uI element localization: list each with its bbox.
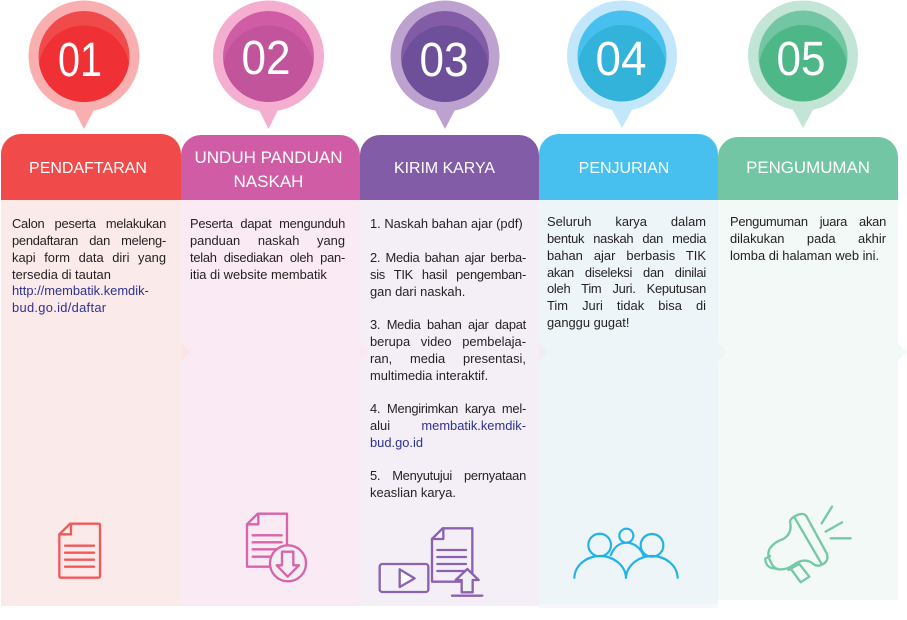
text: pendaftaran description: bud.go.id/daftar bbox=[12, 300, 106, 315]
text: kirim karya steps: gan dari naskah. bbox=[370, 284, 465, 299]
arrow: step 5 end bbox=[898, 344, 906, 360]
arrow: step 2 to 3 bbox=[360, 344, 368, 360]
text: pendaftaran description: http://membatik.kemdik- bbox=[12, 283, 149, 298]
text: kirim karya steps: berupa video pembelaja- bbox=[370, 334, 526, 349]
text: pengumuman description bbox=[730, 214, 886, 263]
header: penjurian bbox=[539, 134, 718, 200]
pin: 01 bbox=[28, 0, 140, 129]
text: pengumuman description: lomba di halaman web ini. bbox=[730, 248, 879, 263]
text: penjurian description: bahan ajar berbasis TIK bbox=[547, 248, 706, 263]
icon: document download bbox=[246, 512, 308, 582]
header: unduh panduan naskah: UNDUH PANDUAN bbox=[194, 148, 342, 167]
text: penjurian description: Seluruh karya dalam bbox=[547, 214, 706, 229]
panel: 02 unduh panduan naskah bbox=[181, 135, 892, 606]
text: kirim karya steps: keaslian karya. bbox=[370, 485, 456, 500]
text: kirim karya steps bbox=[370, 216, 526, 500]
text: kirim karya steps: bud.go.id bbox=[370, 435, 423, 450]
icon: megaphone bbox=[764, 506, 852, 584]
text: penjurian description: oleh Tim Juri. Keputusan bbox=[547, 281, 706, 296]
text: pendaftaran description bbox=[12, 216, 166, 315]
pin: 05: 05 bbox=[776, 33, 826, 86]
header: pendaftaran bbox=[1, 134, 181, 200]
header: kirim karya: KIRIM KARYA bbox=[394, 160, 495, 177]
pin: 03 bbox=[390, 0, 500, 129]
text: penjurian description: Tim Juri tidak bisa di bbox=[547, 298, 706, 313]
text: pendaftaran description: kapi form data diri yang bbox=[12, 250, 166, 265]
text: kirim karya steps: multimedia interaktif. bbox=[370, 368, 488, 383]
text: kirim karya steps: 4. Mengirimkan karya mel- bbox=[370, 401, 526, 416]
panel body background bbox=[539, 200, 718, 608]
text: pengumuman description: Pengumuman juara akan bbox=[730, 214, 886, 229]
text: unduh description: itia di website membatik bbox=[190, 267, 327, 282]
header: pendaftaran: PENDAFTARAN bbox=[29, 160, 147, 177]
text: unduh description: telah disediakan oleh pan- bbox=[190, 250, 345, 265]
text: pengumuman description: dilakukan pada akhir bbox=[730, 231, 886, 246]
pin: 04 bbox=[567, 0, 677, 128]
pin: 04: 04 bbox=[596, 33, 646, 86]
text: unduh description: Peserta dapat mengunduh bbox=[190, 216, 345, 231]
panel body background bbox=[1, 200, 181, 606]
text: penjurian description: bentuk naskah dan media bbox=[547, 231, 706, 246]
text: penjurian description bbox=[547, 214, 706, 330]
icon: video and document upload bbox=[378, 527, 484, 597]
icon: group of people bbox=[573, 528, 679, 579]
panel: 03 kirim karya bbox=[360, 135, 892, 606]
pin badges bbox=[28, 0, 858, 129]
text: pendaftaran description: pendaftaran dan meleng- bbox=[12, 233, 166, 248]
header: unduh panduan naskah bbox=[181, 135, 360, 200]
arrow: step 1 to 2 bbox=[181, 344, 190, 360]
arrow: step 3 to 4 bbox=[539, 344, 548, 360]
text: kirim karya steps: 5. Menyutujui pernyataan bbox=[370, 468, 526, 483]
pin: 03: 03 bbox=[420, 34, 468, 87]
text: pendaftaran description: tersedia di tautan bbox=[12, 267, 111, 282]
text: kirim karya steps: ran, media presentasi, bbox=[370, 351, 526, 366]
text: kirim karya steps: sis TIK hasil pengemban- bbox=[370, 267, 526, 282]
pin: 02: 02 bbox=[242, 32, 290, 85]
text: penjurian description: ganggu gugat! bbox=[547, 315, 629, 330]
panel: 04 penjurian bbox=[539, 134, 718, 608]
text: kirim karya steps: 2. Media bahan ajar berba- bbox=[370, 250, 526, 265]
text: kirim karya steps: 1. Naskah bahan ajar (pdf) bbox=[370, 216, 523, 231]
text: kirim karya steps: alui membatik.kemdik- bbox=[370, 418, 526, 433]
text: kirim karya steps: 3. Media bahan ajar dapat bbox=[370, 317, 526, 332]
panel body background bbox=[360, 200, 539, 606]
header: unduh panduan naskah: NASKAH bbox=[234, 172, 303, 191]
text: pendaftaran description: Calon peserta melakukan bbox=[12, 216, 166, 231]
text: penjurian description: akan diseleksi dan dinilai bbox=[547, 265, 706, 280]
pin: 01: 01 bbox=[58, 34, 102, 87]
header: kirim karya bbox=[360, 135, 539, 200]
pin: 02 bbox=[213, 0, 324, 129]
panel: 05 pengumuman bbox=[718, 137, 898, 600]
header: penjurian: PENJURIAN bbox=[579, 160, 669, 177]
arrow: step 4 to 5 bbox=[718, 343, 727, 361]
pin: 05 bbox=[748, 0, 858, 128]
icon: document bbox=[58, 522, 102, 579]
header: pengumuman: PENGUMUMAN bbox=[746, 158, 870, 177]
text: unduh description bbox=[190, 216, 345, 282]
panel body background bbox=[181, 200, 360, 606]
text: unduh description: panduan naskah yang bbox=[190, 233, 345, 248]
panel body background bbox=[718, 200, 898, 600]
header: pengumuman bbox=[718, 137, 898, 200]
panel: 01 pendaftaran bbox=[1, 134, 181, 606]
